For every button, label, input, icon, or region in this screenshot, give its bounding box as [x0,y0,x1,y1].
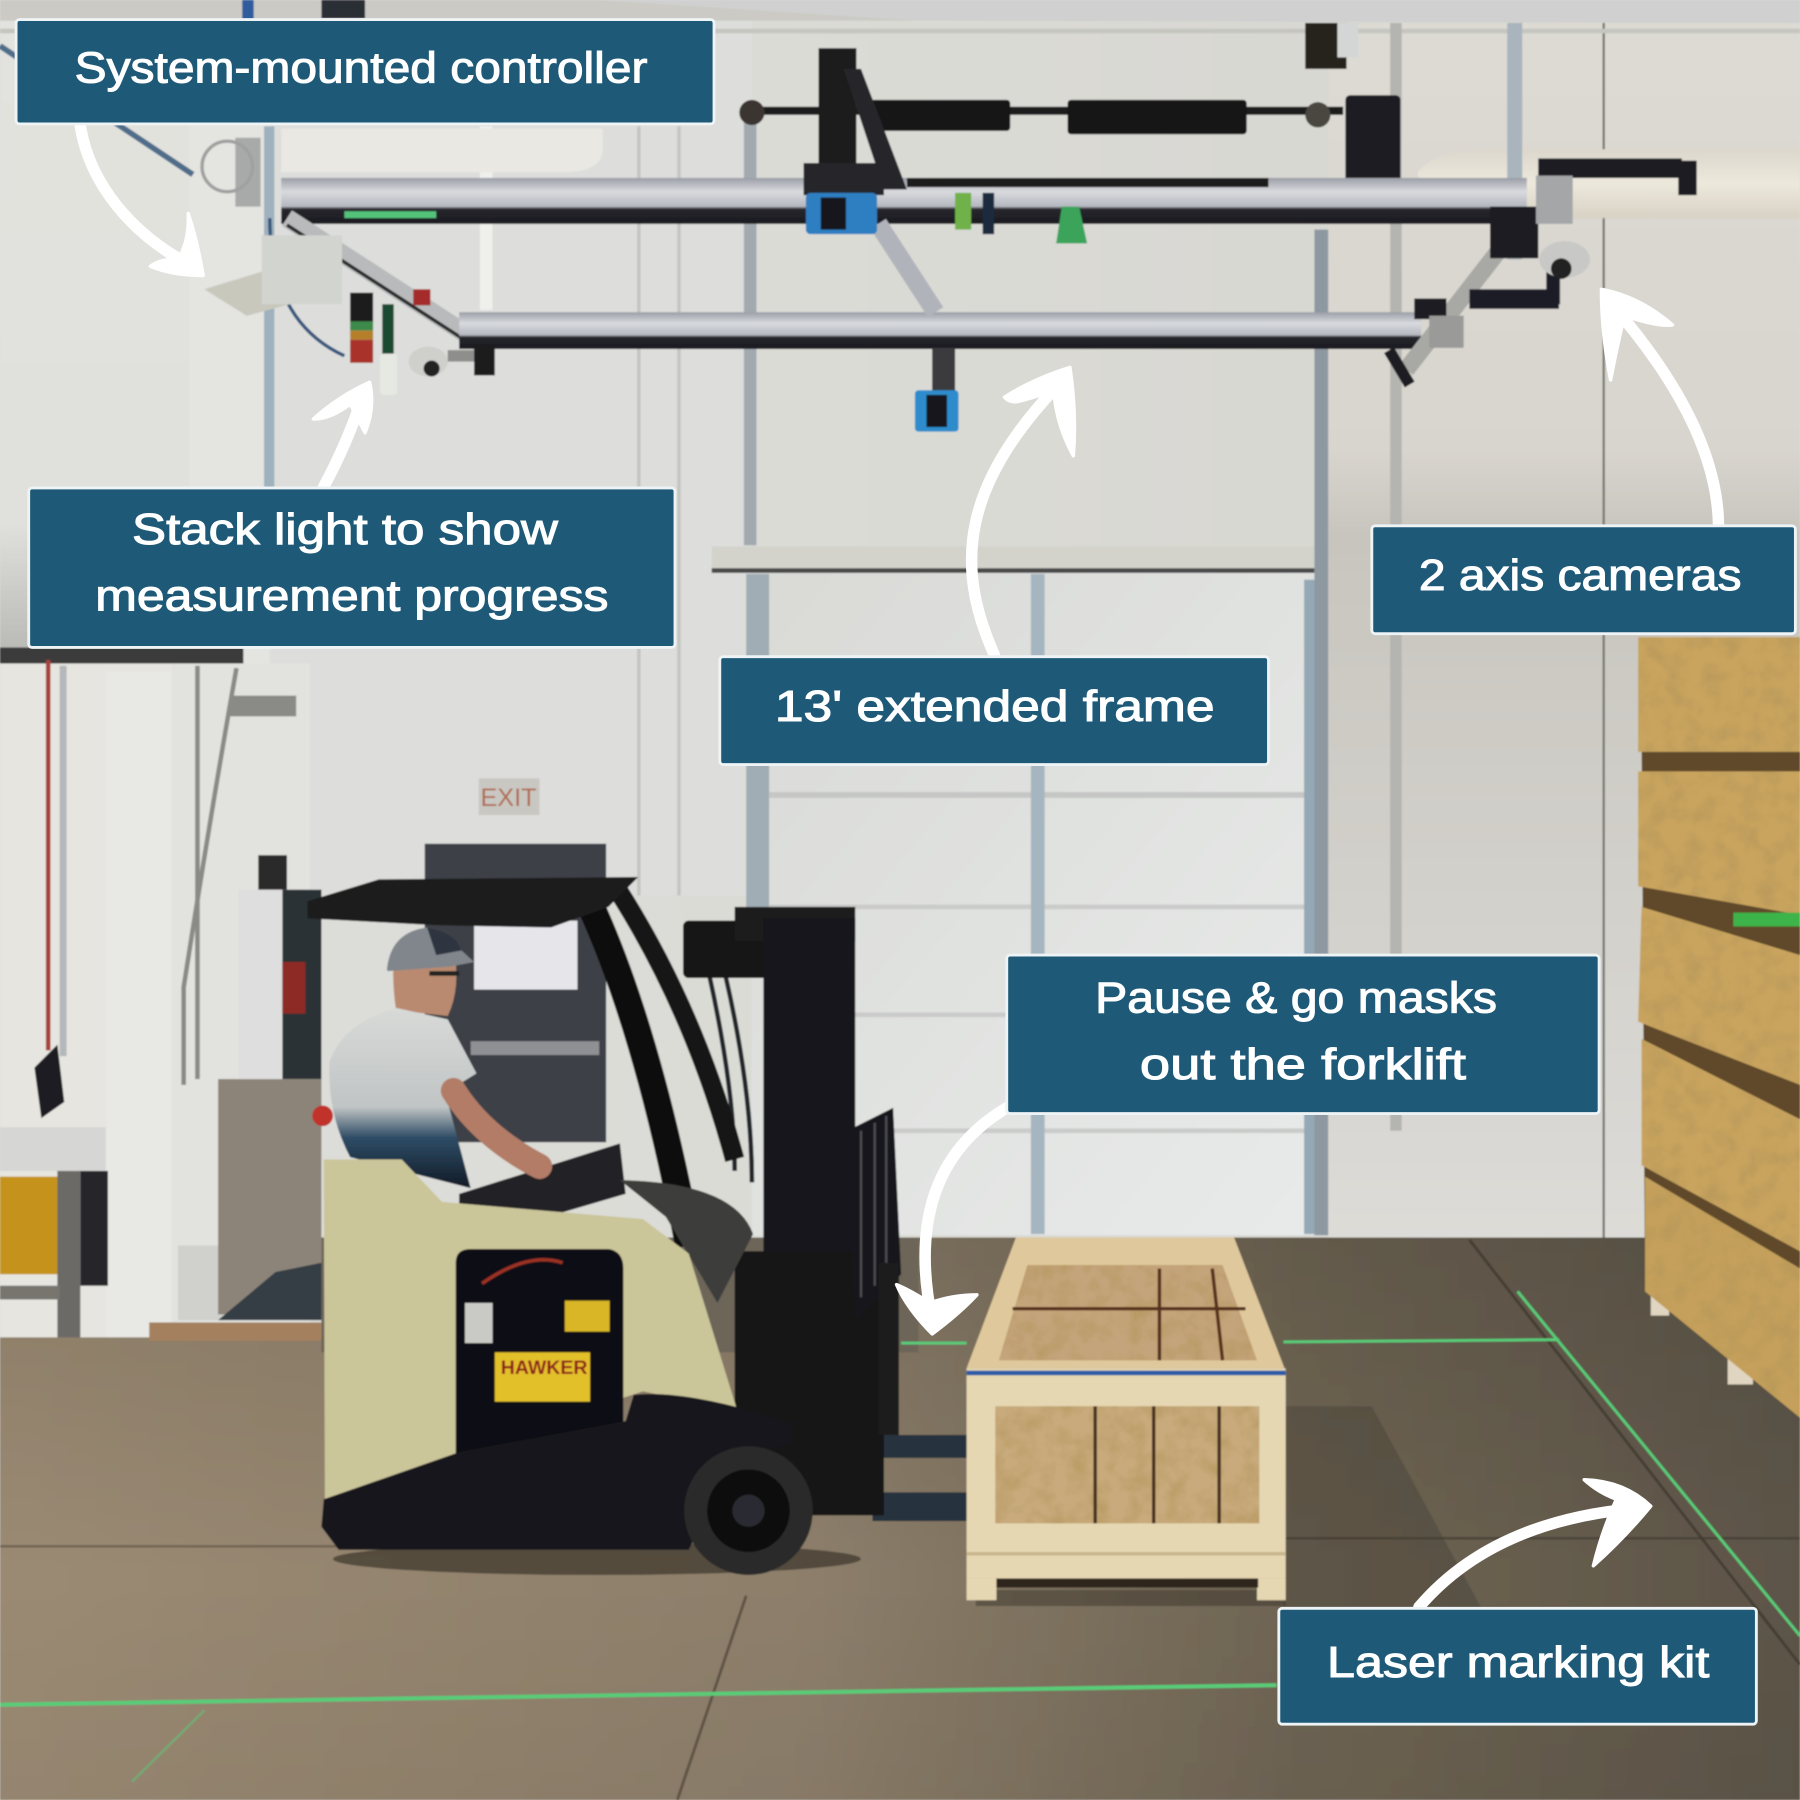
dash and engine cover [459,1143,753,1303]
overhead door [712,23,1402,1235]
rear personnel door: EXIT [480,784,537,812]
dome camera left [409,344,495,377]
OSB crate stack [1638,637,1800,1418]
electrical cabinet [239,855,321,1079]
arrow: to stack light [313,382,372,487]
laser lines [0,1291,1800,1782]
stack light [350,289,430,395]
roof guard and pillars [308,877,735,1246]
front wheel [684,1446,813,1575]
callout: laser marking kit [1279,1480,1756,1724]
callout: system-mounted controller: System-mounted controller [75,45,647,93]
rear personnel door [425,778,606,1142]
floor [0,1238,1800,1800]
lower chassis [321,1394,792,1550]
white duct [281,129,1800,218]
cream body [324,1159,737,1499]
callout: laser marking kit: Laser marking kit [1327,1639,1709,1687]
battery compartment [456,1249,623,1464]
arrow: to frame [972,367,1074,654]
measurement frame [0,23,1697,517]
callout: pause and go [897,955,1599,1334]
callout: stack light: measurement progress [95,573,608,621]
dome camera right [1539,241,1590,279]
cable clips on frame [955,193,1087,243]
arrow: to laser line [1419,1480,1651,1607]
callout: axis cameras: 2 axis cameras [1419,552,1741,600]
door spring shaft and opener [242,0,1401,185]
left doorway and column [0,647,321,1340]
callout: pause and go: Pause & go masks [1095,975,1497,1023]
callout: extended frame [720,367,1268,765]
callout: stack light: Stack light to show [132,506,558,554]
callout: stack light [29,382,675,647]
controller enclosure [204,235,342,316]
forks and mast [683,907,967,1521]
forklift [308,877,967,1575]
callout: system-mounted controller [16,20,714,276]
operator [312,928,540,1188]
crate [967,1238,1286,1600]
battery compartment: HAWKER [501,1357,587,1379]
callout: pause and go: out the forklift [1140,1041,1466,1089]
work table [0,1127,108,1349]
arrow: to forklift [897,1108,1007,1334]
callout: extended frame: 13' extended frame [775,683,1215,731]
callout: axis cameras [1372,289,1795,634]
arrow: to camera [1601,289,1718,523]
arrow: to controller [80,126,203,276]
